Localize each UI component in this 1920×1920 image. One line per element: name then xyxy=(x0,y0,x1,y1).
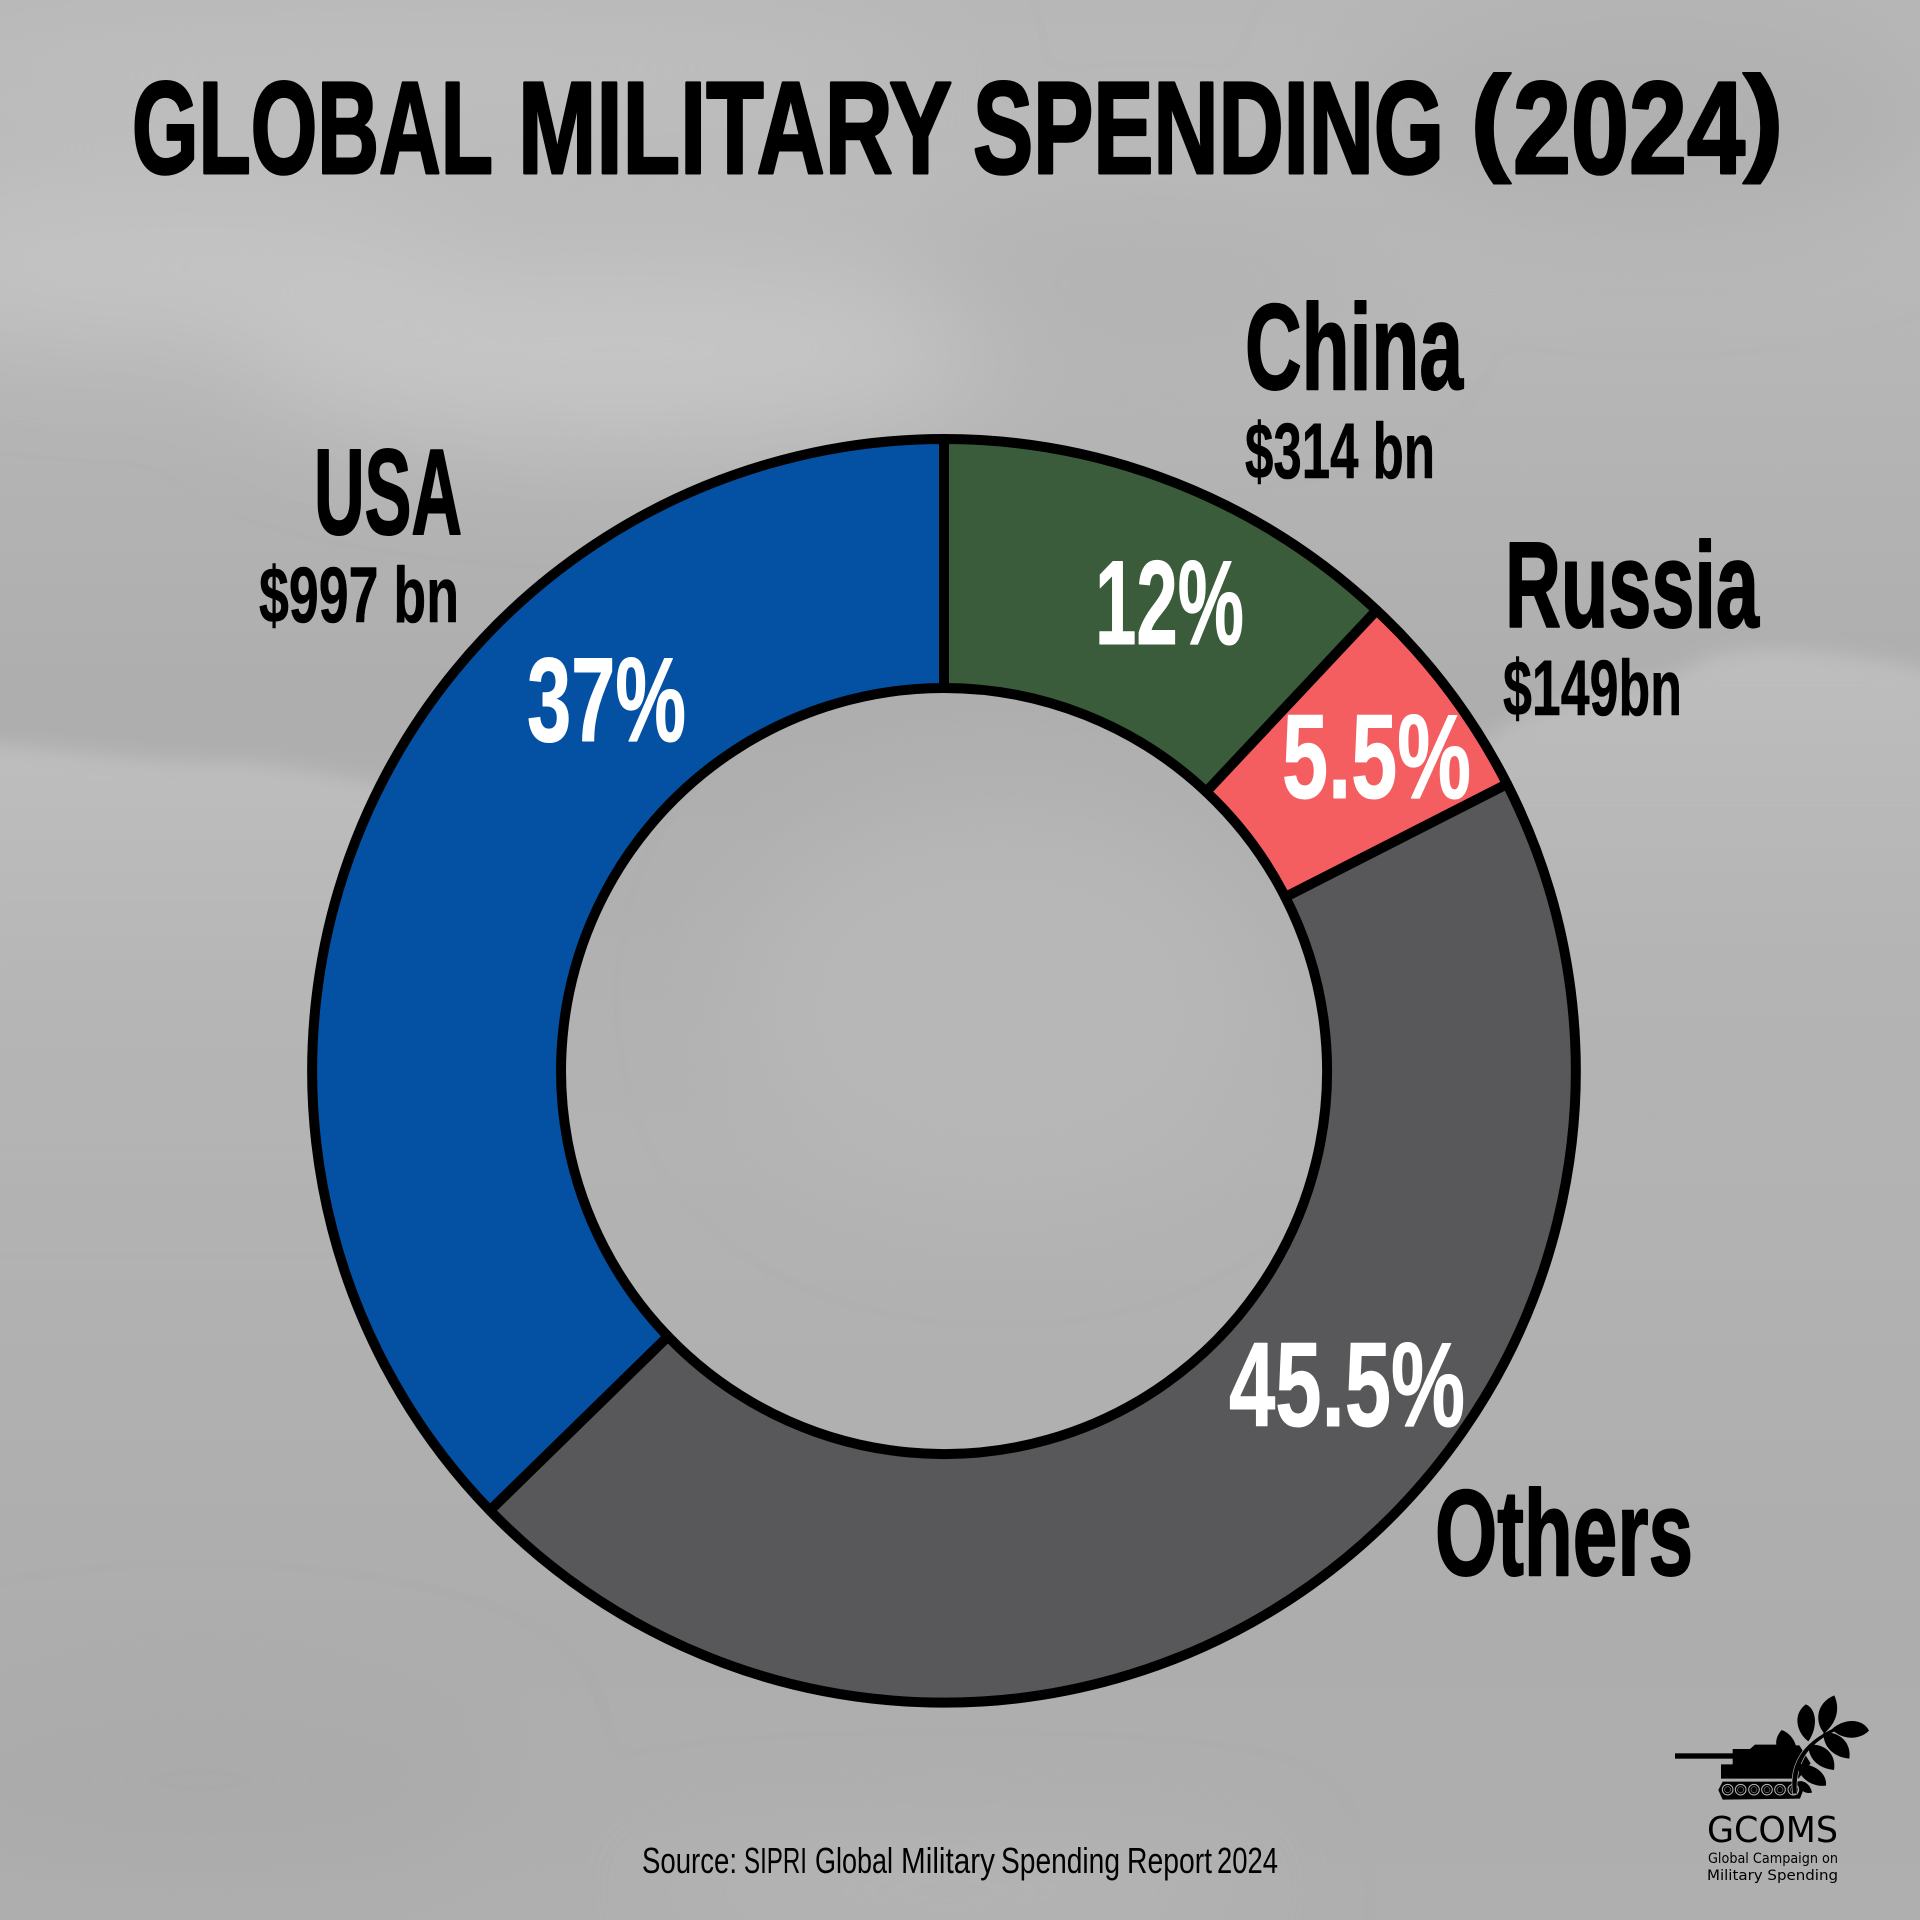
logo wordmark: GCOMS xyxy=(1707,1810,1838,1851)
segment: Others 45.5% xyxy=(490,784,1576,1703)
source note: Report xyxy=(1127,1840,1212,1881)
logo: GCOMS xyxy=(1675,1695,1869,1884)
title: MILITARY xyxy=(518,54,952,201)
segment: China 12% xyxy=(944,439,1377,792)
source note: Global xyxy=(815,1840,893,1881)
source note: 2024 xyxy=(1217,1840,1278,1881)
title: ( xyxy=(1470,52,1511,185)
logo tagline line 1: Global Campaign on xyxy=(1708,1851,1838,1867)
logo tagline line 2: Military Spending xyxy=(1707,1868,1838,1884)
percent: China: 12% xyxy=(1095,536,1244,670)
label: Others: Others xyxy=(1435,1465,1693,1601)
source note: Military xyxy=(901,1840,995,1881)
icon: tank with olive branch xyxy=(1675,1695,1869,1800)
title: 2024 xyxy=(1513,54,1745,201)
donut chart xyxy=(312,439,1576,1703)
source note: SIPRI xyxy=(744,1840,807,1881)
percent: USA: 37% xyxy=(527,633,686,767)
title: SPENDING xyxy=(973,54,1444,201)
title: GLOBAL xyxy=(132,54,493,201)
source note xyxy=(642,1840,1278,1881)
title: ) xyxy=(1743,52,1784,185)
label: China: China xyxy=(1245,279,1464,415)
value: Russia: $149bn xyxy=(1503,643,1682,732)
value: USA: $997 bn xyxy=(259,550,459,639)
label: Russia: Russia xyxy=(1505,517,1760,653)
source note: Spending xyxy=(1001,1840,1120,1881)
percent: Others: 45.5% xyxy=(1229,1318,1465,1452)
percent: Russia: 5.5% xyxy=(1282,690,1471,824)
segment: Russia 5.5% xyxy=(1206,610,1507,897)
label: USA: USA xyxy=(314,424,462,560)
source note: Source: xyxy=(642,1840,737,1881)
title xyxy=(132,52,1784,201)
segment: USA 37% xyxy=(312,439,944,1510)
value: China: $314 bn xyxy=(1245,406,1435,495)
